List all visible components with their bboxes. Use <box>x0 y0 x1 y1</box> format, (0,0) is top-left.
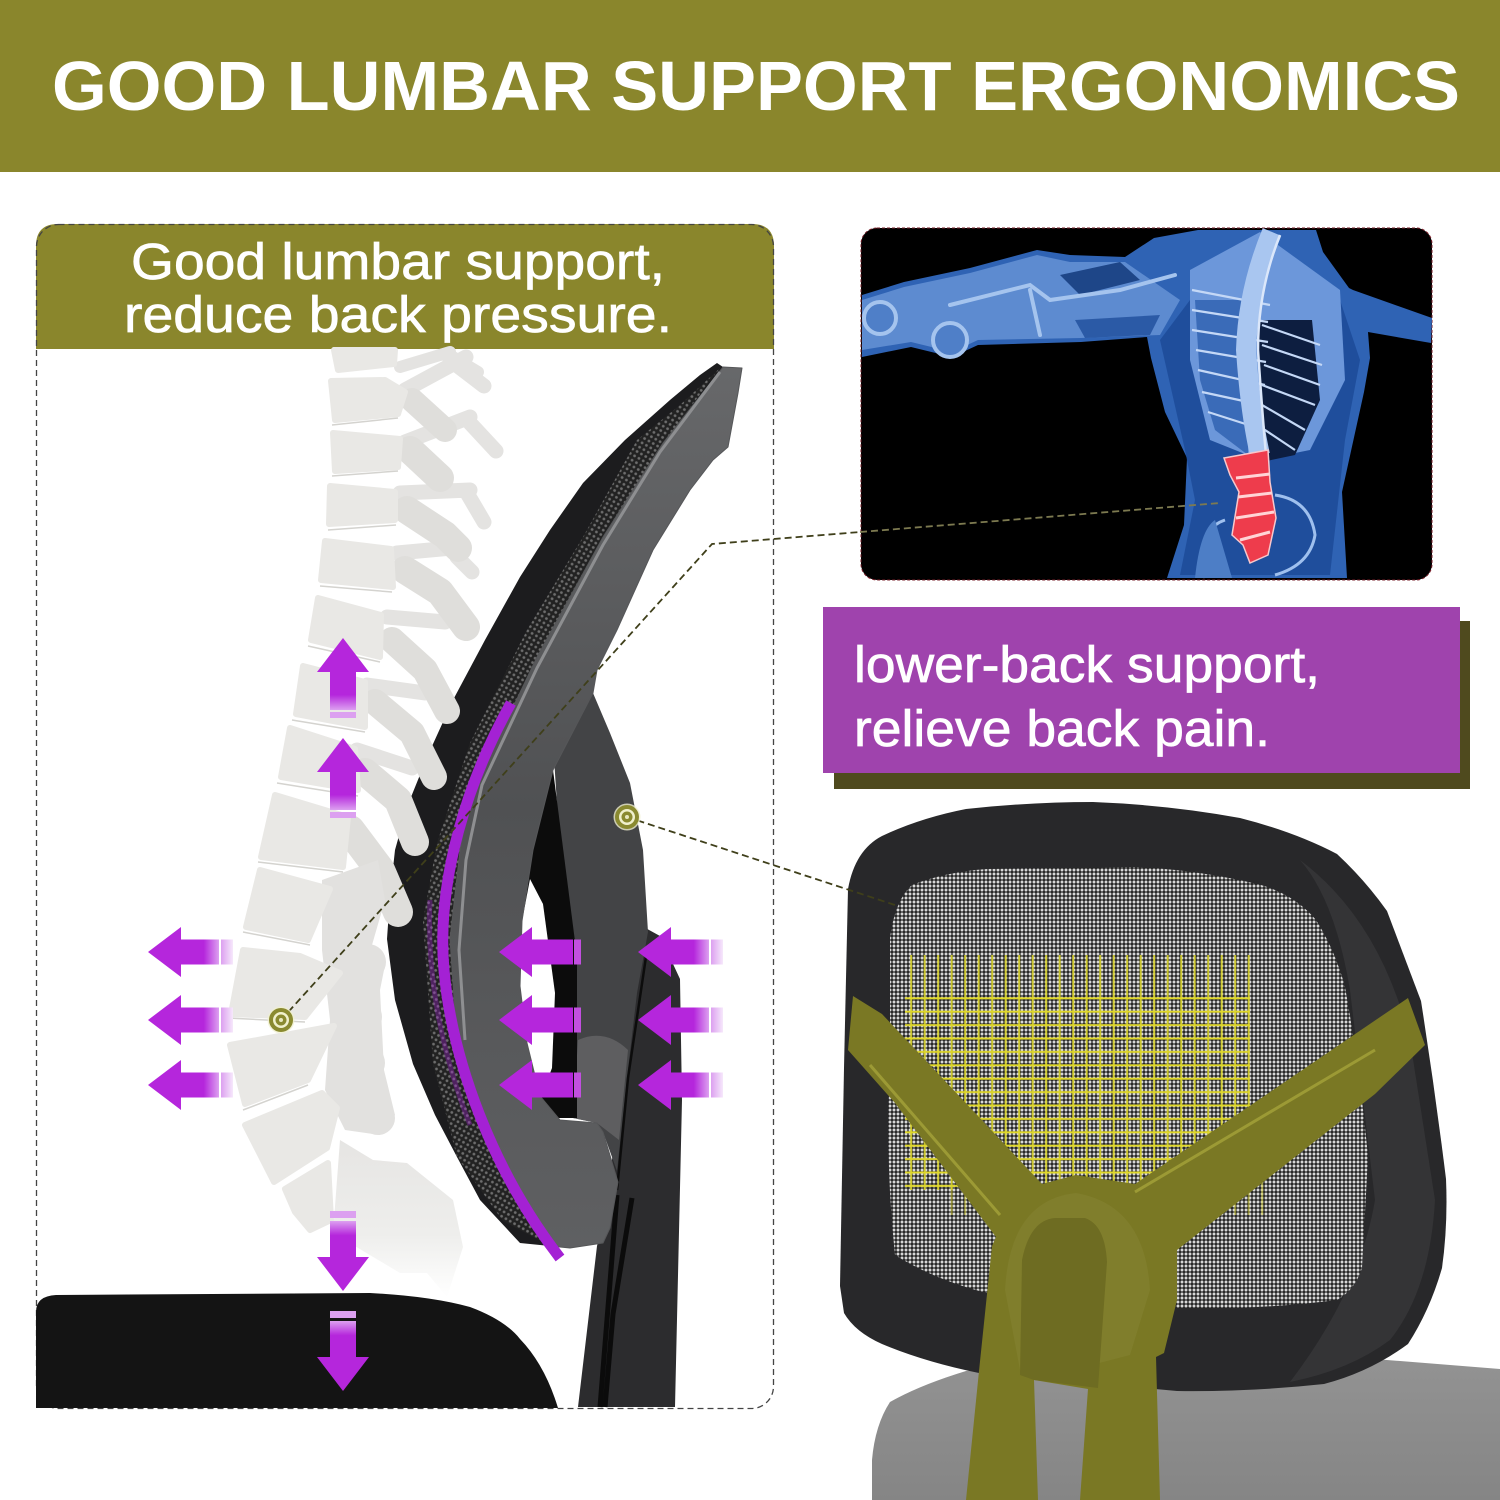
rib cavity <box>1258 320 1320 462</box>
arm bones <box>864 275 1175 357</box>
bracket hub <box>1005 1193 1150 1380</box>
disc shading <box>228 418 398 1110</box>
leader lines <box>281 503 1220 1020</box>
mesh <box>888 867 1368 1308</box>
backrest frame <box>840 802 1446 1391</box>
panel heading band <box>36 224 774 349</box>
torso shading <box>1160 300 1360 575</box>
sacrum <box>333 1140 463 1297</box>
bracket arm highlights <box>870 1050 1375 1215</box>
lumbar facet column <box>322 860 395 1135</box>
cut-out opening <box>520 879 555 1096</box>
chair back side profile <box>387 363 742 1407</box>
plastic frame <box>450 367 742 1248</box>
frame sheen <box>1290 860 1435 1382</box>
yellow mesh grid <box>905 955 1270 1215</box>
seat cushion <box>36 1293 558 1408</box>
x-ray body and arm <box>862 230 1432 578</box>
callout: lower-back support <box>823 607 1470 789</box>
callout: lower-back support: relieve back pain. <box>854 700 1270 757</box>
header banner <box>0 0 1500 172</box>
spine column <box>1246 232 1272 455</box>
highlighted lumbar vertebrae <box>1224 450 1276 563</box>
articular facets <box>350 400 466 912</box>
vertebrae bodies <box>230 350 405 1230</box>
callout: lower-back support: lower-back support, <box>854 636 1320 693</box>
pelvis <box>1202 495 1315 578</box>
panel: lumbar support side view <box>36 224 774 1408</box>
mesh lane <box>423 368 720 1246</box>
panel heading text <box>124 233 672 343</box>
spinal processes <box>357 352 496 768</box>
panel heading text: Good lumbar support, <box>131 233 665 290</box>
ribs <box>1192 290 1322 450</box>
target marker: spine <box>268 1006 294 1034</box>
target marker: chair <box>614 804 640 830</box>
title: GOOD LUMBAR SUPPORT ERGONOMICS <box>52 47 1460 125</box>
panel: x-ray image <box>861 228 1432 580</box>
inner support arm <box>550 693 648 1171</box>
Y bracket <box>848 996 1425 1500</box>
purple lumbar curve <box>443 703 560 1258</box>
pressure arrows <box>148 638 723 1391</box>
spine illustration <box>228 350 496 1297</box>
backrest rear view <box>840 802 1500 1500</box>
seat <box>872 1355 1500 1500</box>
panel heading text: reduce back pressure. <box>124 286 672 343</box>
upright post <box>578 925 682 1407</box>
outer cushion back <box>387 363 723 1248</box>
cut-out shadow <box>520 770 577 1118</box>
frame highlight <box>459 372 720 1040</box>
forearm highlight <box>862 255 1180 352</box>
